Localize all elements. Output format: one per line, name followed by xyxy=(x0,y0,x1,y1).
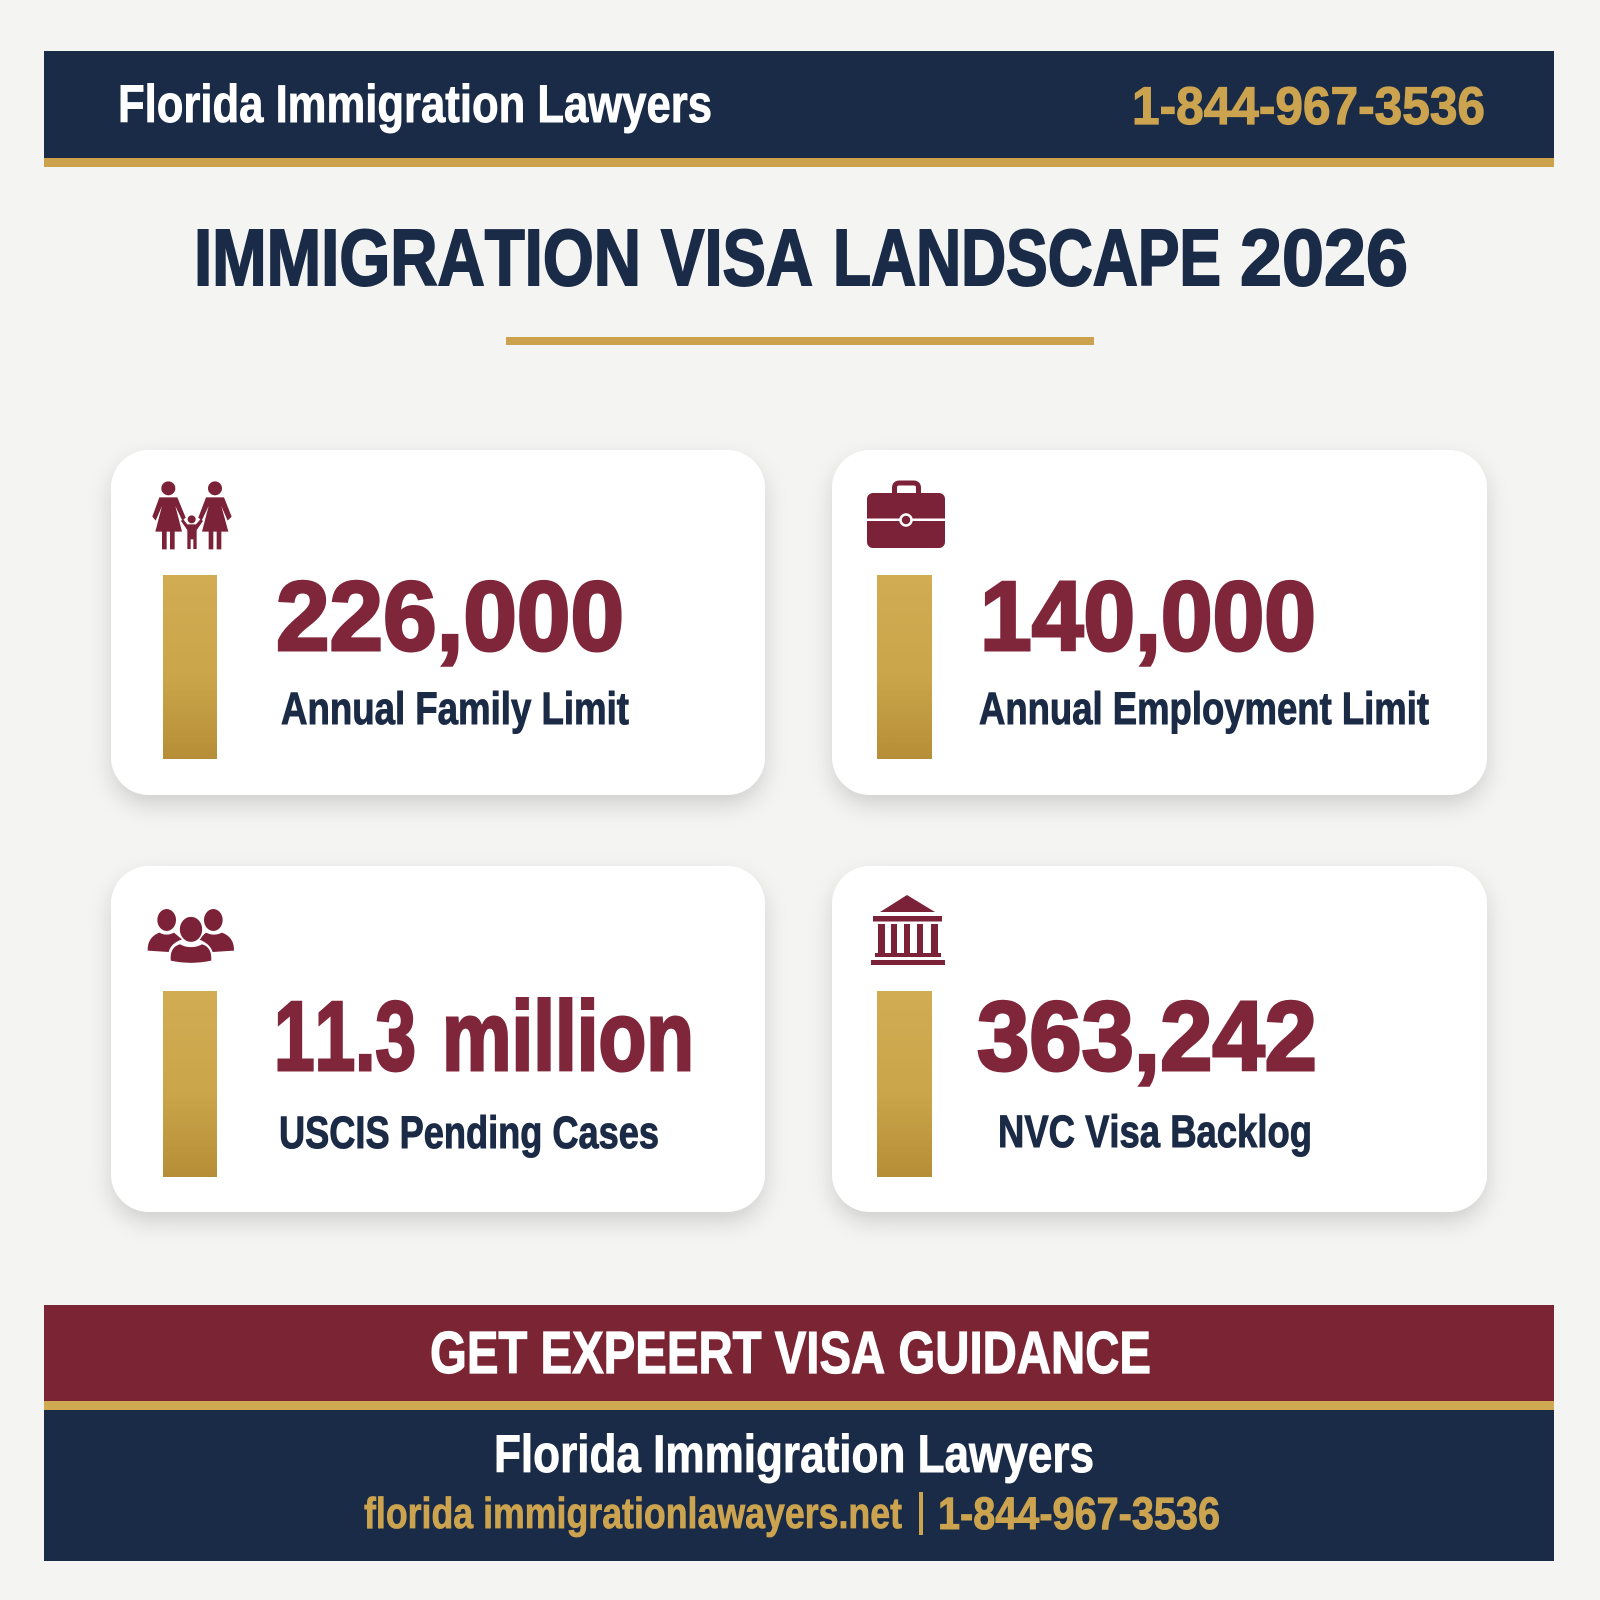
stat value: million xyxy=(442,981,694,1091)
title: 2026 xyxy=(1240,213,1408,302)
stat label: USCIS Pending Cases xyxy=(279,1107,659,1158)
panel: NVC visa backlog xyxy=(832,866,1487,1212)
footer phone number: 1-844-967-3536 xyxy=(938,1488,1220,1539)
stat label: NVC Visa Backlog xyxy=(998,1106,1312,1157)
stat value: 140,000 xyxy=(980,561,1316,671)
header phone number: 1-844-967-3536 xyxy=(1132,77,1485,136)
title: IMMIGRATION xyxy=(194,213,641,302)
title: VISA xyxy=(661,213,813,302)
gold bar xyxy=(163,575,217,759)
title xyxy=(194,213,1408,302)
gold bar xyxy=(877,575,932,759)
title: LANDSCAPE xyxy=(833,213,1221,302)
call to action text: GET EXPEERT VISA GUIDANCE xyxy=(430,1320,1151,1386)
panel: USCIS pending cases xyxy=(111,866,765,1212)
call to action banner xyxy=(44,1305,1554,1401)
stat value xyxy=(274,981,694,1091)
panel: annual employment limit xyxy=(832,450,1487,795)
footer firm name: Florida Immigration Lawyers xyxy=(494,1425,1094,1484)
stat label: Annual Employment Limit xyxy=(979,683,1429,734)
icon: government building xyxy=(871,895,945,965)
stat value: 226,000 xyxy=(276,561,624,671)
panel: annual family limit xyxy=(111,450,765,795)
gold bar xyxy=(163,991,217,1177)
footer contact panel xyxy=(44,1410,1554,1561)
icon: group of people xyxy=(148,909,234,964)
icon: family xyxy=(152,481,232,549)
icon: briefcase xyxy=(867,483,945,548)
header firm name: Florida Immigration Lawyers xyxy=(118,75,712,134)
header bar xyxy=(44,51,1554,167)
footer website: florida immigrationlawayers.net xyxy=(364,1489,902,1538)
stat value: 11.3 xyxy=(274,981,416,1091)
gold bar xyxy=(877,991,932,1177)
stat label: Annual Family Limit xyxy=(281,683,629,734)
stat value: 363,242 xyxy=(977,981,1317,1091)
